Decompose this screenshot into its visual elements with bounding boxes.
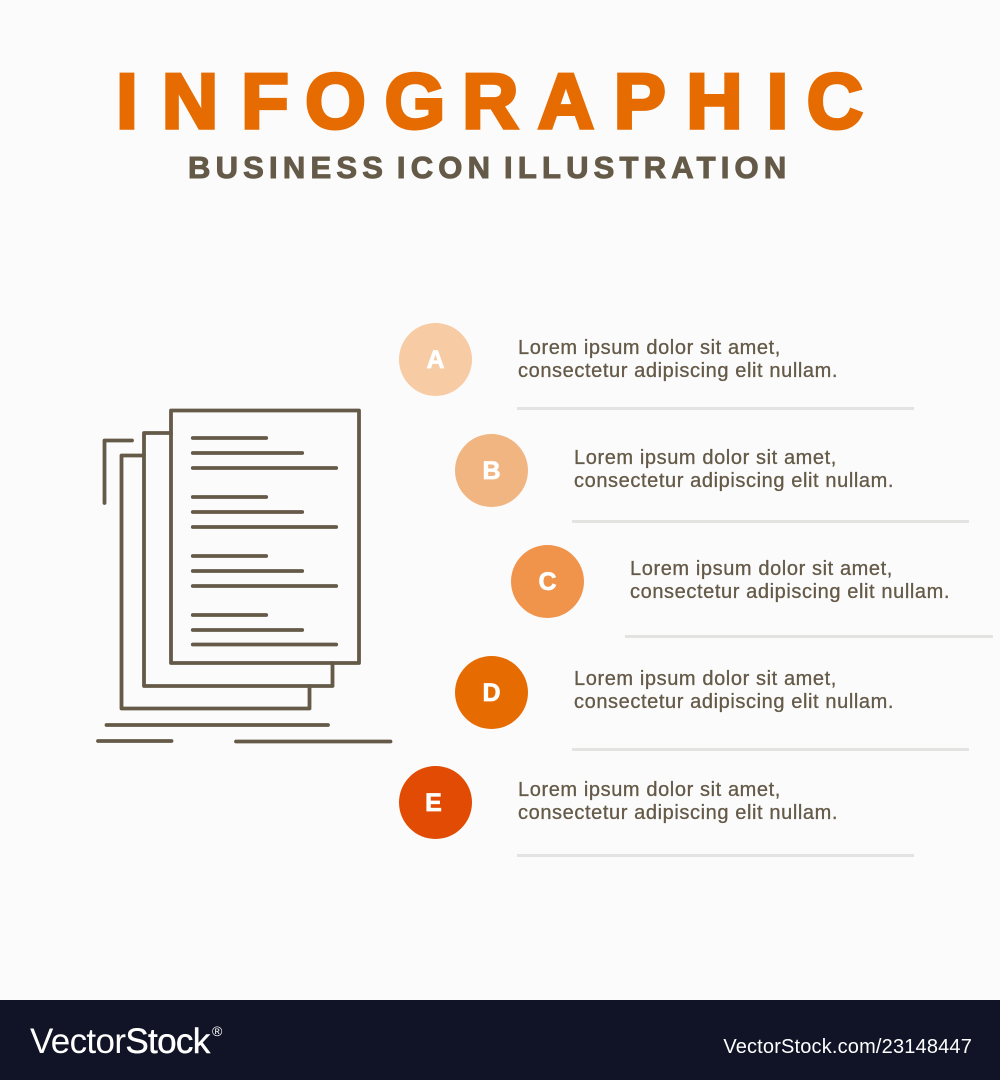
text C [630,558,950,603]
badge D: D [482,679,501,707]
badge A: A [426,346,445,374]
text E [518,779,838,824]
text B: Lorem ipsum dolor sit amet, [574,447,837,469]
title: I [116,56,138,144]
title: C [807,56,863,144]
footer logo: VectorStock [30,1022,210,1061]
text A: Lorem ipsum dolor sit amet, [518,337,781,359]
title: A [538,56,594,144]
title: R [462,56,518,144]
text A [518,337,838,382]
step B [455,434,969,523]
title: N [162,56,218,144]
title [116,56,864,144]
step D [455,656,969,751]
badge A [399,323,472,396]
badge C: C [538,568,557,596]
badge C [511,545,584,618]
step E [399,766,914,857]
text E: consectetur adipiscing elit nullam. [518,802,838,824]
text C: Lorem ipsum dolor sit amet, [630,558,893,580]
badge B [455,434,528,507]
title: O [305,56,366,144]
title: P [614,56,666,144]
badge E [399,766,472,839]
text C: consectetur adipiscing elit nullam. [630,581,950,603]
text E: Lorem ipsum dolor sit amet, [518,779,781,801]
icon: code files [96,408,392,744]
badge B: B [482,457,501,485]
badge D [455,656,528,729]
text D: Lorem ipsum dolor sit amet, [574,668,837,690]
title: F [241,56,289,144]
text B: consectetur adipiscing elit nullam. [574,470,894,492]
text B [574,447,894,492]
step C [511,545,993,638]
footer bar [0,1000,1000,1080]
text A: consectetur adipiscing elit nullam. [518,360,838,382]
subtitle: BUSINESS ICON ILLUSTRATION [188,150,791,185]
step A [399,323,914,410]
text D [574,668,894,713]
title: G [385,56,445,144]
footer logo: ® [212,1023,222,1039]
text D: consectetur adipiscing elit nullam. [574,691,894,713]
badge E: E [425,789,442,817]
title: I [767,56,788,144]
title: H [686,56,743,144]
footer url: VectorStock.com/23148447 [723,1036,972,1058]
